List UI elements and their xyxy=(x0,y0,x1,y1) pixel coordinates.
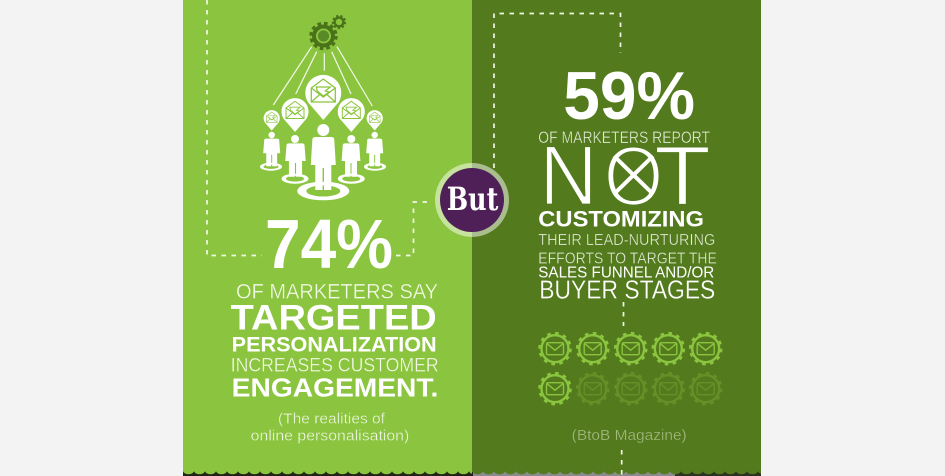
text block: right panel message: EFFORTS TO TARGET THE xyxy=(538,250,717,267)
panel: right dark green background xyxy=(472,0,761,475)
text block: left panel message: PERSONALIZATION xyxy=(232,334,437,357)
text block: left panel message: ENGAGEMENT. xyxy=(232,373,438,403)
text block: right panel message: CUSTOMIZING xyxy=(538,207,704,232)
dashed connector: left panel xyxy=(207,0,432,256)
dashed connector: right panel bottom xyxy=(621,450,623,476)
source: left panel: online personalisation) xyxy=(251,428,409,445)
icon: people on rings xyxy=(260,124,386,200)
text block: left panel message: OF MARKETERS SAY xyxy=(236,280,438,303)
icon: email pins xyxy=(264,75,383,132)
dashed connector: right panel top xyxy=(494,14,620,168)
text block: left panel message xyxy=(231,280,439,403)
text block: right panel message: THEIR LEAD-NURTURING xyxy=(538,232,715,249)
icon: connecting lines xyxy=(273,47,372,106)
icon row: second row email gears xyxy=(540,373,721,404)
text block: right panel message xyxy=(538,207,717,304)
source: right panel: (BtoB Magazine) xyxy=(572,427,687,444)
heading: NOT with crossed O xyxy=(540,128,711,223)
text block: right panel message: SALES FUNNEL AND/OR xyxy=(538,265,714,282)
dashed connector: right panel middle xyxy=(622,302,624,326)
heading: NOT with crossed O: T xyxy=(654,128,711,222)
icon row: highlighted email gears xyxy=(540,333,721,364)
badge: But: But xyxy=(447,180,498,218)
text block: right panel message: BUYER STAGES xyxy=(539,274,715,304)
source: left panel xyxy=(251,410,409,445)
text block: left panel message: TARGETED xyxy=(231,298,437,337)
statistic: 59%: 59% xyxy=(563,58,695,134)
badge: But xyxy=(435,163,509,237)
text block: left panel message: INCREASES CUSTOMER xyxy=(231,356,439,377)
statistic: 74%: 74% xyxy=(265,205,393,283)
icon: gears xyxy=(311,16,345,48)
heading: NOT with crossed O: N xyxy=(540,128,598,222)
heading: NOT with crossed O: O xyxy=(604,129,664,223)
panel: left green background xyxy=(183,0,761,476)
text: of marketers report: OF MARKETERS REPORT xyxy=(538,129,710,147)
source: left panel: (The realities of xyxy=(278,410,386,427)
